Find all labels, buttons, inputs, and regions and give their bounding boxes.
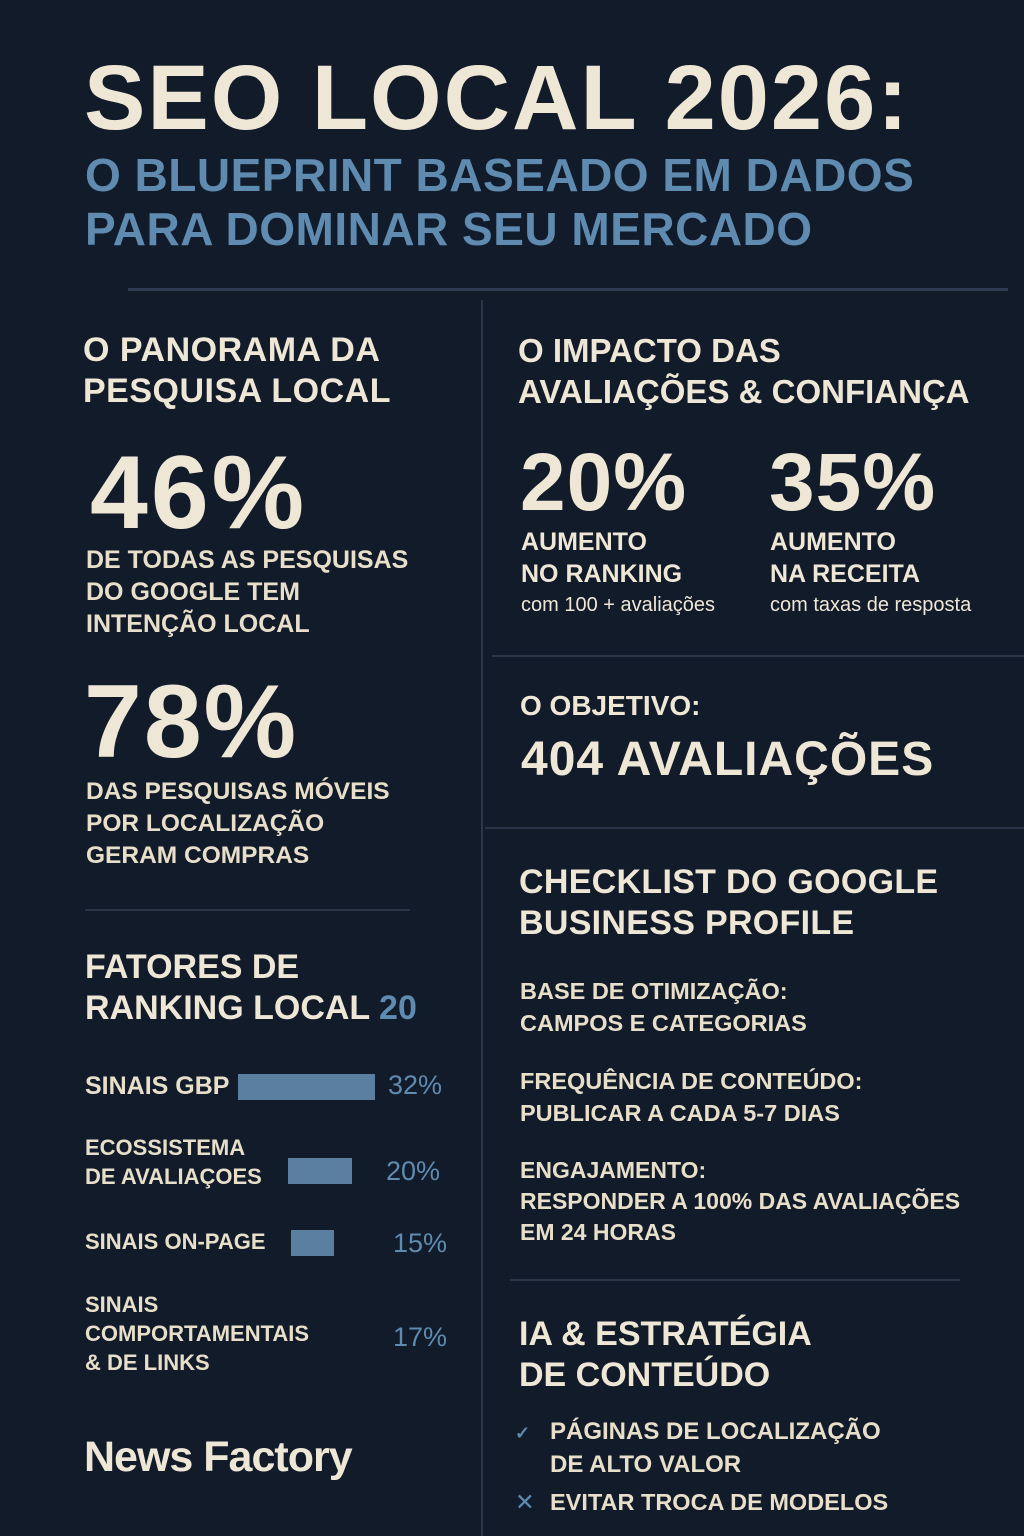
item: páginas (515, 1418, 881, 1478)
bar: ecossistema: 20% (386, 1156, 440, 1186)
bar: comportamentais: SINAIS (85, 1292, 158, 1317)
stat 78%: 78% (84, 664, 298, 780)
item: engajamento: EM 24 HORAS (520, 1219, 676, 1245)
stat 46%: 46% (90, 435, 307, 551)
bar: comportamentais: & DE LINKS (85, 1350, 210, 1375)
bar: comportamentais (85, 1292, 447, 1375)
logo: News Factory: News Factory (84, 1433, 352, 1481)
stat 35%: com taxas de resposta (770, 594, 971, 616)
stat 20%: 20% (520, 437, 687, 528)
subtitle: PARA DOMINAR SEU MERCADO (85, 203, 813, 255)
bar: on-page: SINAIS ON-PAGE (85, 1229, 266, 1254)
stat 20%: AUMENTO (521, 528, 647, 556)
item: base: BASE DE OTIMIZAÇÃO: (520, 978, 788, 1004)
heading: checklist: CHECKLIST DO GOOGLE (519, 863, 938, 901)
item: páginas: ✓ (515, 1423, 530, 1443)
item: páginas: PÁGINAS DE LOCALIZAÇÃO (550, 1418, 881, 1445)
item: frequência: PUBLICAR A CADA 5-7 DIAS (520, 1100, 840, 1126)
item: engajamento (520, 1157, 960, 1245)
text: objetivo label: O OBJETIVO: (520, 690, 700, 721)
panel: IA & conteúdo (515, 1314, 888, 1515)
panel: panorama (83, 331, 408, 869)
text: 78% description: DAS PESQUISAS MÓVEIS (86, 778, 390, 805)
heading: IA: DE CONTEÚDO (519, 1356, 770, 1394)
heading: IA: IA & ESTRATÉGIA (519, 1315, 812, 1353)
text: 78% description (86, 777, 390, 869)
stat: 404 avaliações: 404 AVALIAÇÕES (521, 733, 934, 786)
panel: fatores de ranking (85, 948, 447, 1375)
item: engajamento: ENGAJAMENTO: (520, 1157, 706, 1183)
heading: fatores (85, 948, 417, 1027)
heading: fatores: RANKING LOCAL 20 (85, 989, 417, 1027)
heading: IA (519, 1314, 812, 1394)
stat 20%: com 100 + avaliações (521, 594, 715, 616)
item: evitar: ✕ (515, 1489, 535, 1515)
panel: checklist (519, 863, 960, 1245)
item: engajamento: RESPONDER A 100% DAS AVALIAÇÕES (520, 1188, 960, 1214)
heading: panorama: PESQUISA LOCAL (83, 372, 391, 410)
bar: sinais gbp: 32% (388, 1070, 442, 1100)
text: 46% description: INTENÇÃO LOCAL (86, 610, 310, 638)
subtitle: O BLUEPRINT BASEADO EM DADOS (85, 149, 914, 201)
bar: on-page (85, 1228, 447, 1258)
title: SEO LOCAL 2026: (84, 47, 910, 149)
item: base (520, 978, 807, 1036)
stat 20% (520, 437, 715, 616)
text: 78% description: GERAM COMPRAS (86, 842, 309, 869)
item: evitar: EVITAR TROCA DE MODELOS (550, 1489, 888, 1515)
item: páginas: DE ALTO VALOR (550, 1451, 741, 1478)
item: frequência (520, 1068, 862, 1126)
stat 35%: 35% (769, 437, 936, 528)
bar: comportamentais: 17% (393, 1322, 447, 1352)
panel: avaliações (518, 332, 972, 616)
bar: ecossistema: ECOSSISTEMA (85, 1135, 245, 1160)
item: frequência: FREQUÊNCIA DE CONTEÚDO: (520, 1068, 862, 1094)
text: 46% description: DE TODAS AS PESQUISAS (86, 546, 408, 574)
stat 35%: AUMENTO (770, 528, 896, 556)
bar: sinais gbp (85, 1070, 442, 1100)
heading: panorama: O PANORAMA DA (83, 331, 380, 369)
text: 46% description (86, 546, 408, 638)
heading: panorama (83, 331, 391, 410)
text: 46% description: DO GOOGLE TEM (86, 578, 300, 606)
stat 20%: NO RANKING (521, 560, 682, 588)
heading: avaliações: O IMPACTO DAS (518, 332, 781, 369)
heading: avaliações: AVALIAÇÕES & CONFIANÇA (518, 373, 970, 410)
bar: ecossistema (85, 1135, 440, 1189)
panel: objetivo (520, 690, 934, 786)
bar: comportamentais: COMPORTAMENTAIS (85, 1321, 309, 1346)
heading: checklist: BUSINESS PROFILE (519, 904, 854, 942)
item: base: CAMPOS E CATEGORIAS (520, 1010, 807, 1036)
bar: sinais gbp: SINAIS GBP (85, 1072, 229, 1100)
subtitle (85, 149, 914, 255)
bar: on-page: 15% (393, 1228, 447, 1258)
heading: checklist (519, 863, 938, 942)
heading: fatores: FATORES DE (85, 948, 299, 986)
bar: ecossistema: DE AVALIAÇOES (85, 1164, 262, 1189)
heading: avaliações (518, 332, 970, 410)
text: 78% description: POR LOCALIZAÇÃO (86, 810, 324, 837)
stat 35% (769, 437, 972, 616)
stat 35%: NA RECEITA (770, 560, 920, 588)
